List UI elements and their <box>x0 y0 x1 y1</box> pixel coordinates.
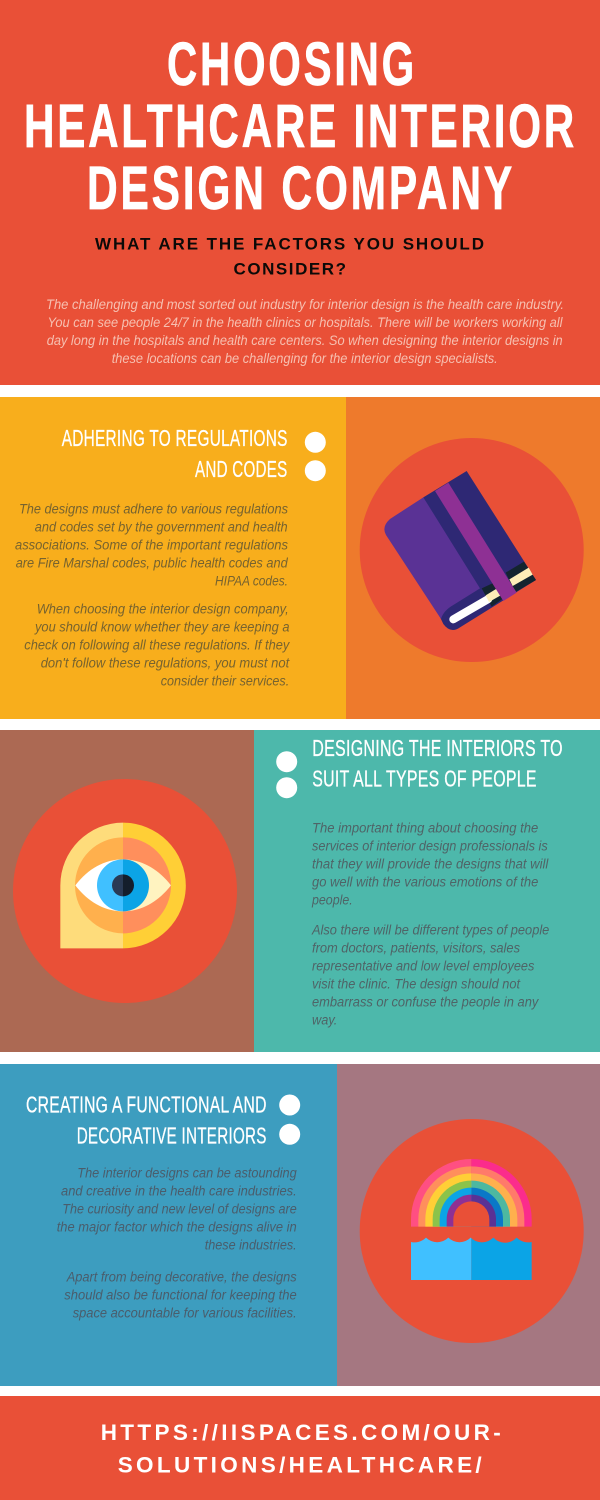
panel: footer <box>0 1396 600 1500</box>
body text: regulations: and codes set by the government and health <box>35 519 288 535</box>
body text: functional <box>57 1165 297 1321</box>
body text: regulations <box>15 501 290 689</box>
footer url: SOLUTIONS/HEALTHCARE/ <box>118 1453 482 1478</box>
body text: functional: should also be functional for keeping the <box>64 1287 297 1303</box>
heading bullets <box>279 1094 300 1145</box>
title <box>24 30 577 222</box>
body text: interiors: that they will provide the designs that will <box>312 857 549 873</box>
subtitle: CONSIDER? <box>234 260 346 278</box>
body text: regulations: associations. Some of the important regulations <box>15 537 288 553</box>
body text: functional: the major factor which the designs alive in <box>57 1219 297 1235</box>
heading: regulations: ADHERING TO REGULATIONS <box>62 425 288 451</box>
heading: functional: DECORATIVE INTERIORS <box>77 1122 267 1148</box>
footer url: HTTPS://IISPACES.COM/OUR- <box>101 1420 501 1445</box>
body text: functional: The interior designs can be astounding <box>77 1165 297 1181</box>
body text: regulations: HIPAA codes. <box>215 573 288 589</box>
body text: functional: and creative in the health care industries. <box>61 1183 297 1199</box>
intro text <box>46 297 564 367</box>
intro text: these locations can be challenging for the interior design specialists. <box>112 351 498 367</box>
body text: regulations: consider their services. <box>161 673 289 689</box>
body text: regulations: are Fire Marshal codes, public health codes and <box>16 555 289 571</box>
heading: interiors <box>312 735 563 792</box>
body text: interiors: embarrass or confuse the people in any <box>312 994 539 1010</box>
body text: interiors: visit the clinic. The design should not <box>312 976 521 992</box>
title: CHOOSING <box>167 30 417 98</box>
body text: interiors: go well with the various emotions of the <box>312 875 538 891</box>
body text: regulations: check on following all these regulations. If they <box>24 637 290 653</box>
heading: regulations <box>62 425 288 482</box>
body text: regulations: The designs must adhere to various regulations <box>19 501 288 517</box>
subtitle <box>95 234 484 278</box>
body text: interiors: Also there will be different types of people <box>311 922 549 938</box>
body text: functional: Apart from being decorative, the designs <box>66 1269 297 1285</box>
body text: interiors: way. <box>312 1012 337 1028</box>
body text: interiors: people. <box>311 893 353 909</box>
body text: regulations: When choosing the interior design company, <box>37 601 289 617</box>
panel: header <box>0 0 600 385</box>
body text: functional: these industries. <box>205 1237 297 1253</box>
subtitle: WHAT ARE THE FACTORS YOU SHOULD <box>95 234 484 254</box>
intro text: You can see people 24/7 in the health clinics or hospitals. There will be workers working all <box>48 315 563 331</box>
body text: interiors <box>311 821 549 1028</box>
panel: functional and decorative <box>0 1064 600 1386</box>
heading: functional <box>26 1092 267 1148</box>
body text: regulations: don't follow these regulations, you must not <box>41 655 290 671</box>
body text: interiors: representative and low level employees <box>312 958 534 974</box>
panel: adhering to regulations <box>0 397 600 719</box>
icon: rainbow <box>360 1119 584 1343</box>
body text: regulations: you should know whether they are keeping a <box>34 619 290 635</box>
body text: functional: The curiosity and new level of designs are <box>62 1201 297 1217</box>
intro text: The challenging and most sorted out industry for interior design is the health care industry. <box>46 297 564 313</box>
body text: interiors: from doctors, patients, visitors, sales <box>312 940 520 956</box>
body text: functional: space accountable for various facilities. <box>73 1305 297 1321</box>
heading bullets <box>305 432 326 481</box>
heading: regulations: AND CODES <box>195 456 288 482</box>
body text: interiors: services of interior design professionals is <box>312 839 548 855</box>
footer url <box>101 1420 501 1478</box>
heading: functional: CREATING A FUNCTIONAL AND <box>26 1092 267 1118</box>
heading bullets <box>276 751 297 798</box>
icon: eye <box>13 779 237 1003</box>
body text: interiors: The important thing about choosing the <box>312 821 538 837</box>
icon: book <box>360 438 584 662</box>
panel: designing the interiors <box>0 730 600 1052</box>
